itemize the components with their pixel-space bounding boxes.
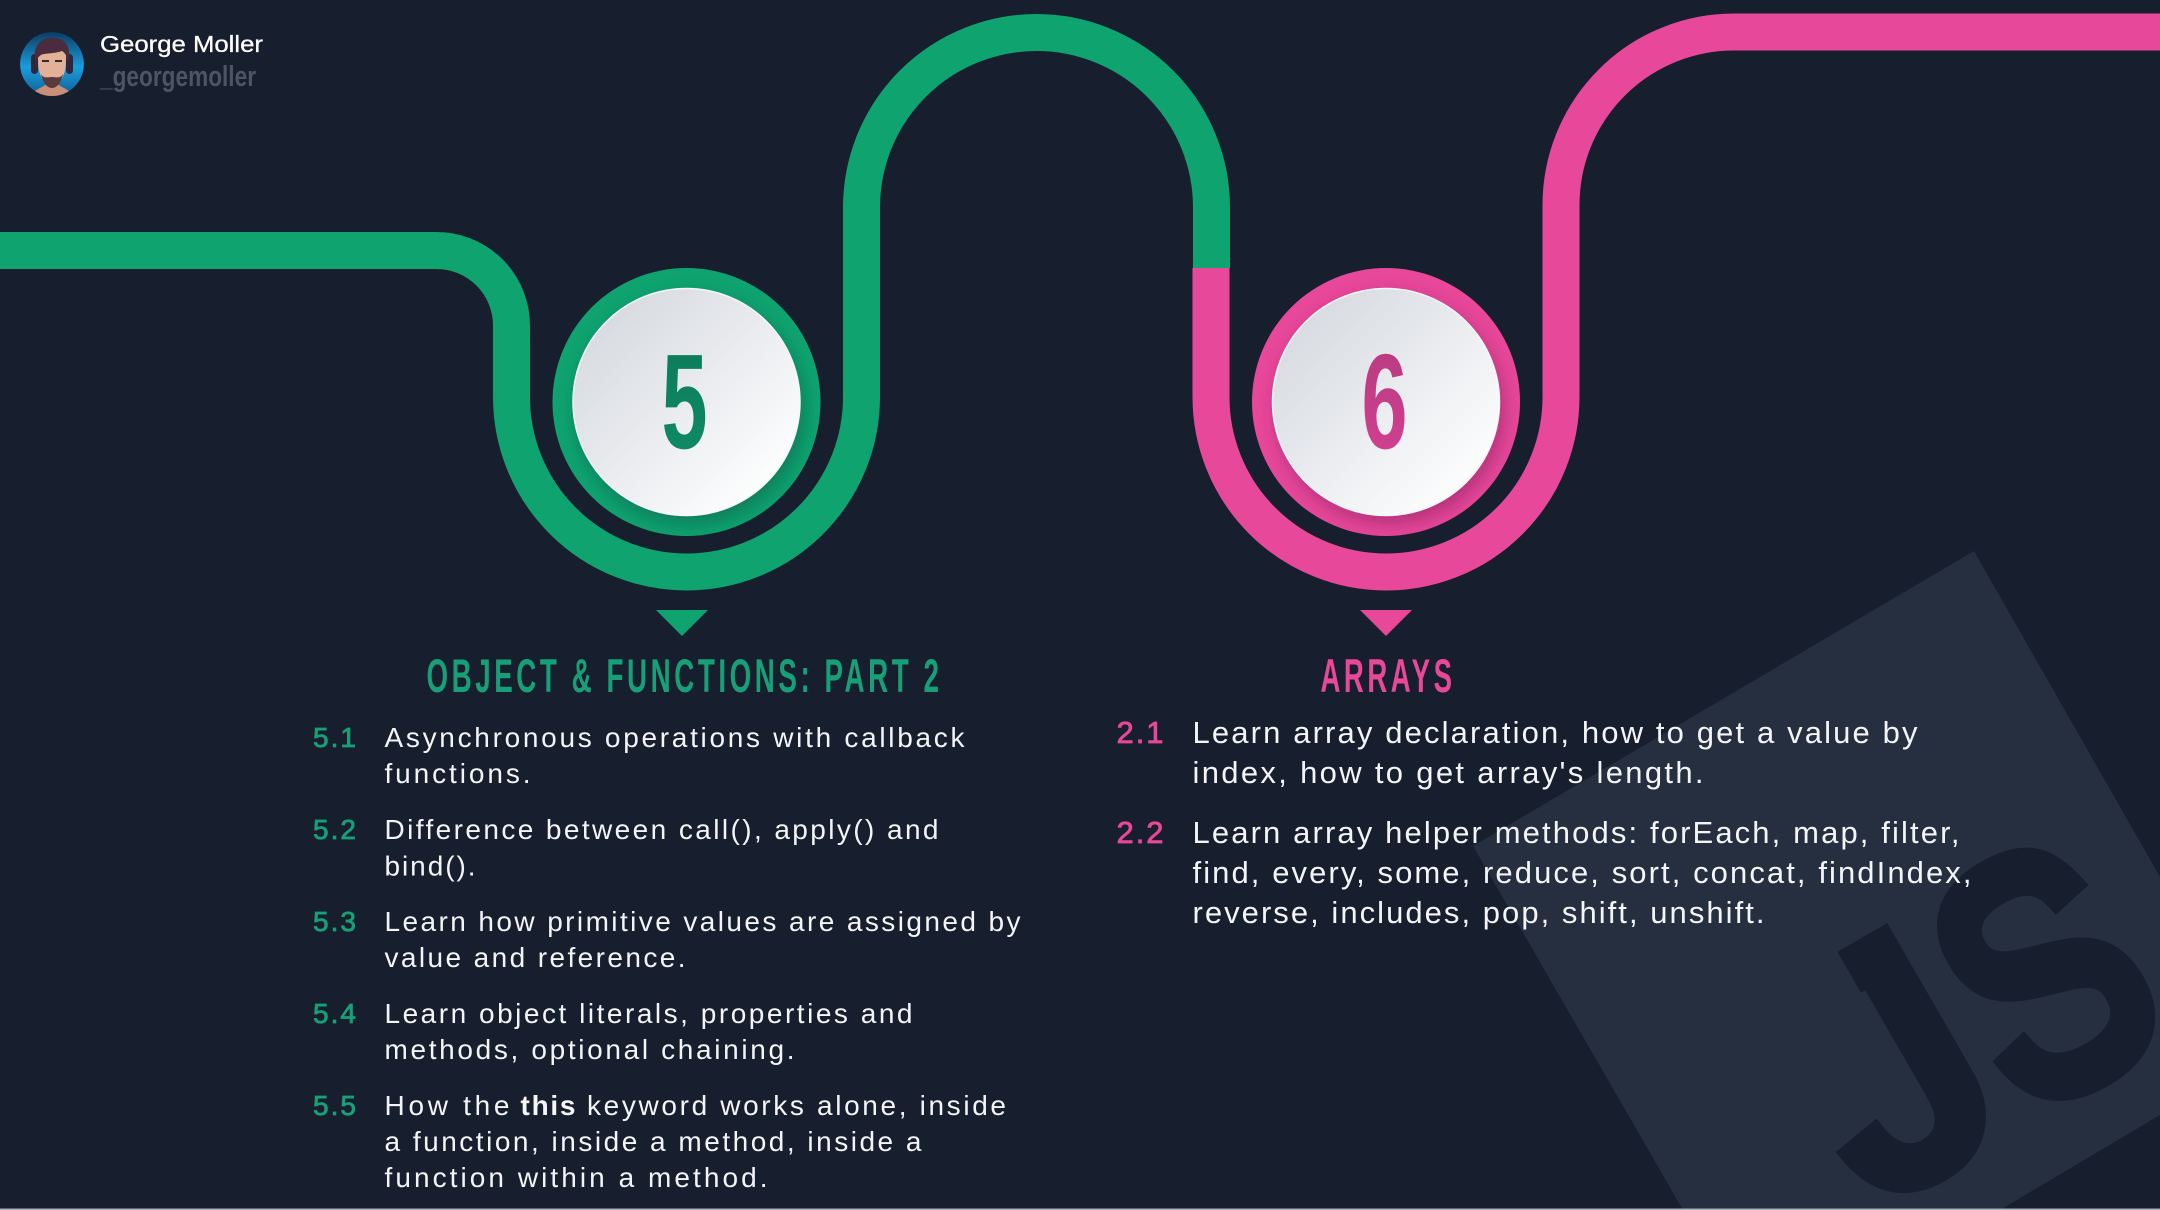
list: section 2 topics <box>1116 715 1972 930</box>
green roadmap track <box>0 32 1212 572</box>
item 2.1: index, how to get array's length. <box>1192 755 1704 790</box>
heading: objects and functions: OBJECT & FUNCTIONS: PART 2 <box>426 649 942 702</box>
item 5.5: this <box>520 1090 576 1121</box>
JS logo watermark <box>1473 551 2160 1210</box>
author handle: _georgemoller <box>99 61 256 93</box>
arrow: pink pointer <box>1360 610 1412 636</box>
item 5.3: Learn how primitive values are assigned by <box>384 906 1020 937</box>
item 5.5 <box>313 1090 1006 1193</box>
item 5.2: 5.2 <box>313 814 356 845</box>
item 2.2: reverse, includes, pop, shift, unshift. <box>1192 895 1764 930</box>
milestone 6 badge <box>1252 268 1520 536</box>
item 2.2: find, every, some, reduce, sort, concat, findIndex, <box>1192 855 1972 890</box>
item 5.2 <box>313 814 938 882</box>
author name: George Moller <box>100 31 263 57</box>
milestone 6 badge: 6 <box>1362 326 1408 477</box>
item 2.2: 2.2 <box>1116 815 1164 850</box>
item 5.3 <box>313 906 1020 973</box>
item 5.3: 5.3 <box>313 906 356 937</box>
pink roadmap track <box>1211 32 2160 572</box>
icon: author avatar <box>20 32 84 100</box>
item 2.1: 2.1 <box>1116 715 1164 750</box>
item 5.1: Asynchronous operations with callback <box>384 722 966 753</box>
item 5.4: Learn object literals, properties and <box>384 998 912 1029</box>
item 5.1 <box>313 722 966 789</box>
item 5.2: bind(). <box>384 850 476 882</box>
milestone 5 badge: 5 <box>662 326 708 477</box>
item 5.4: 5.4 <box>313 998 356 1029</box>
item 5.4: methods, optional chaining. <box>384 1034 794 1065</box>
item 2.2 <box>1116 815 1972 930</box>
item 5.5: function within a method. <box>384 1162 768 1193</box>
item 2.2: Learn array helper methods: forEach, map, filter, <box>1192 815 1960 850</box>
item 2.1 <box>1116 715 1918 790</box>
item 5.5: keyword works alone, inside <box>587 1090 1006 1121</box>
heading: arrays: ARRAYS <box>1320 649 1456 702</box>
item 5.3: value and reference. <box>384 942 686 973</box>
item 5.2: Difference between call(), apply() and <box>384 814 938 845</box>
arrow: green pointer <box>656 610 708 636</box>
item 5.1: functions. <box>384 758 530 789</box>
item 5.5: How the <box>384 1090 510 1121</box>
item 5.4 <box>313 998 912 1065</box>
item 2.1: Learn array declaration, how to get a value by <box>1192 715 1918 750</box>
item 5.1: 5.1 <box>313 722 356 753</box>
list: section 5 topics <box>313 722 1020 1193</box>
item 5.5: a function, inside a method, inside a <box>384 1126 922 1157</box>
milestone 5 badge <box>552 268 820 536</box>
item 5.5: 5.5 <box>313 1090 356 1121</box>
